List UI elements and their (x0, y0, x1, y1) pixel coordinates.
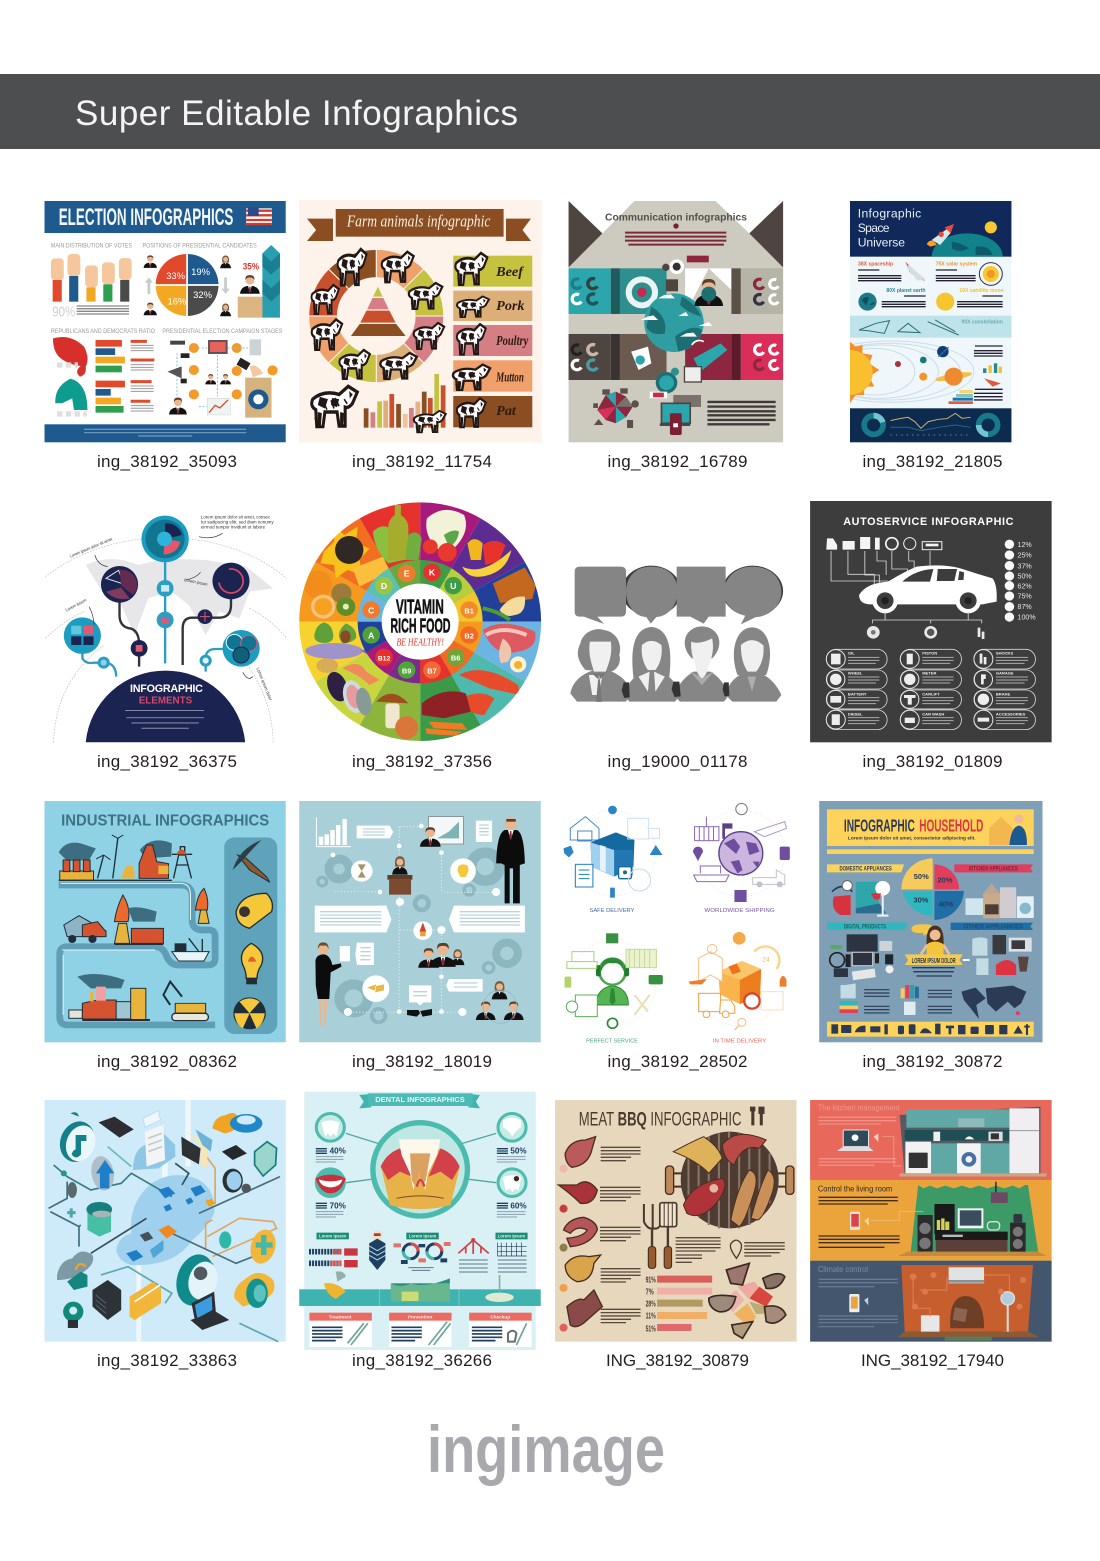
fork and spatula (644, 1203, 677, 1268)
meat pie (709, 1263, 786, 1338)
icon: flag (246, 208, 272, 225)
section headings: The kitchen management (818, 1103, 900, 1113)
tooth stats left (315, 1112, 346, 1210)
panel: space universe (850, 201, 1012, 442)
top icons (826, 537, 942, 550)
pin (730, 1240, 741, 1258)
outer sectors (299, 502, 541, 741)
panel: autoservice infographic (810, 501, 1052, 742)
icon: upload arrow (89, 1154, 117, 1192)
world map (86, 558, 273, 635)
panel: infographic household (819, 801, 1043, 1042)
facts: 16X satellite moon (959, 288, 1004, 294)
bottom chart bar (850, 408, 1011, 442)
section labels: KITCHEN APPLIANCES (969, 865, 1018, 872)
panel: delivery icons (564, 803, 790, 1044)
caption row 2: ing_19000_01178 (608, 752, 748, 771)
clock and laptop (650, 367, 701, 407)
icons: shuttle planets (858, 262, 1002, 311)
tooth stats left: 70% (330, 1201, 346, 1210)
candidates pie chart: 16% (167, 296, 186, 307)
callout boxes (315, 821, 525, 1006)
tablet (849, 1294, 868, 1312)
chevrons stack (369, 1231, 385, 1270)
panel: election infographics (45, 201, 286, 442)
wheel centre text: RICH FOOD (390, 614, 451, 637)
treatment cards: Prevention (408, 1315, 432, 1320)
dotted connectors (334, 827, 496, 1012)
domestic items (832, 881, 890, 916)
presentation screen (420, 817, 463, 847)
woman with banner: LOREM IPSUM DOLOR (912, 958, 956, 965)
vitamin badges: B1 (464, 606, 474, 615)
pill text: DIESEL (848, 711, 863, 716)
icon: rack server (92, 1280, 121, 1320)
panel: farm animals (299, 200, 542, 442)
worldwide shipping: WORLDWIDE SHIPPING (704, 908, 775, 914)
central cloud (116, 1175, 214, 1265)
panel: dental infographics (299, 1092, 541, 1350)
meat labels: Beef (495, 264, 524, 280)
percent list: 12% (1018, 542, 1032, 549)
household pie: 50% (914, 872, 929, 881)
digital items (830, 934, 894, 980)
gears (318, 853, 518, 1022)
rocket (927, 224, 954, 247)
constellation strip: 90X constellation (961, 319, 1003, 325)
election title: ELECTION INFOGRAPHICS (59, 204, 233, 231)
panel: election infographics: PRESIDENTIAL ELECTION CAMPAIGN STAGES (162, 328, 283, 335)
podium speaker (387, 856, 412, 895)
vitamin badges: C (368, 605, 375, 615)
caption row 3: ing_38192_28502 (608, 1052, 748, 1071)
pill text: METER (922, 671, 937, 676)
in time delivery (688, 932, 786, 1044)
globe (641, 293, 712, 352)
safe delivery: SAFE DELIVERY (590, 908, 635, 914)
team and trio (418, 943, 524, 1023)
dental ribbon title (359, 1093, 480, 1108)
ring icons (570, 277, 781, 372)
bar chart: 28% (646, 1300, 656, 1309)
section headings (818, 1103, 900, 1274)
industrial title: INDUSTRIAL INFOGRAPHICS (61, 812, 269, 830)
caption row 4: ING_38192_30879 (606, 1351, 749, 1370)
elephant and donkey icons (53, 337, 88, 414)
vitamin badges: E (404, 569, 410, 579)
candidates pie chart: 32% (193, 289, 212, 300)
panel: communication infographics (569, 201, 783, 442)
big tooth (370, 1120, 470, 1219)
small chart and pyramid (949, 363, 1002, 404)
pill text: ACCESSORIES (996, 711, 1026, 716)
pill text: BRAKE (996, 691, 1011, 696)
tree and grid (458, 1238, 527, 1256)
hexagonal pie (593, 388, 639, 428)
household banner: HOUSEHOLD (919, 816, 983, 836)
circle: puzzle (64, 617, 101, 654)
icon: trash (86, 1202, 112, 1237)
ship (172, 938, 209, 961)
icon: cloud top (212, 1113, 262, 1133)
caption row 3: ing_38192_30872 (862, 1052, 1002, 1071)
panel: election infographics: REPUBLICANS AND DEMOCRATS RATIO (51, 328, 155, 335)
tooth stats right: 60% (510, 1201, 527, 1210)
pill text: BATTERY (848, 691, 867, 696)
caption row 1: ing_38192_35093 (97, 452, 237, 471)
bar chart (364, 374, 445, 428)
constellation strip (850, 316, 1011, 338)
bar chart (646, 1276, 712, 1333)
facts (858, 261, 1004, 294)
bar chart: 91% (646, 1276, 656, 1285)
space title: Space (858, 221, 890, 235)
perfect service (565, 933, 663, 1044)
icon: router (222, 1145, 247, 1160)
orange hub (158, 1225, 177, 1238)
road (59, 885, 215, 1025)
percent list: 100% (1018, 614, 1036, 621)
footer bar (45, 424, 286, 442)
percent list: 62% (1018, 583, 1032, 590)
kitchen items (965, 883, 1034, 918)
ring charts (393, 1242, 451, 1264)
caption row 1: ing_38192_21805 (862, 452, 1002, 471)
callouts: Lorem ipsum dolor sit amet (69, 536, 114, 559)
caption row 1: ing_38192_16789 (608, 452, 748, 471)
bar chart: 11% (646, 1312, 656, 1321)
lorem tags (316, 1233, 528, 1239)
pill text: CARLIFT (922, 691, 940, 696)
communication title: Communication infographics (605, 213, 747, 224)
caption row 1: ing_38192_11754 (352, 452, 492, 471)
cloud servers (126, 1185, 206, 1262)
space title: Infographic (858, 206, 921, 220)
percent list: 50% (1018, 573, 1032, 580)
panel: election infographics: 90% (52, 305, 75, 321)
businesswoman (315, 942, 341, 1026)
panel: vitamin wheel (299, 502, 541, 741)
pill text: OIL (848, 651, 855, 656)
callouts: Lorem ipsum (65, 597, 88, 613)
section labels: DOMESTIC APPLIANCES (839, 866, 892, 873)
wheel centre text: BE HEALTHY! (397, 638, 444, 649)
arch (86, 671, 245, 742)
icon: lock cloud (57, 1252, 93, 1290)
facts: 75X solar system (936, 261, 978, 267)
phone (850, 1212, 869, 1230)
caption row 4: ING_38192_17940 (861, 1351, 1004, 1370)
icon: plus badge (247, 1227, 279, 1266)
speech bubbles (575, 566, 783, 624)
section headings: Control the living room (818, 1183, 892, 1193)
phone on laptop (660, 403, 690, 435)
percent list: 75% (1018, 594, 1032, 601)
treatment cards (309, 1313, 532, 1347)
campaign stages (167, 339, 278, 418)
tooth stats right (497, 1112, 528, 1210)
vitamin badges: B2 (464, 631, 474, 640)
icon: disc (171, 1250, 222, 1310)
icon: device (61, 1170, 77, 1218)
meat labels: Poultry (496, 333, 529, 349)
icon: laptop (190, 1292, 229, 1330)
service pills (826, 649, 1035, 730)
household banner: INFOGRAPHIC (844, 816, 915, 836)
person 2 (624, 627, 680, 702)
circle: pie (101, 566, 138, 603)
pill text: WHEEL (848, 671, 863, 676)
meat labels: Pork (496, 298, 525, 314)
panel: election infographics: MAIN DISTRIBUTION OF VOTES (51, 242, 132, 249)
household pie: 40% (938, 900, 954, 909)
callouts: Lorem ipsum (184, 577, 208, 587)
caption row 2: ing_38192_36375 (97, 752, 237, 771)
person 4 (726, 627, 781, 702)
section labels (827, 864, 1033, 931)
caption row 3 (97, 1052, 1002, 1071)
top factories (59, 835, 192, 880)
header banner (0, 74, 1100, 149)
icon: fork knife (750, 1107, 765, 1125)
dental ribbon title: DENTAL INFOGRAPHICS (375, 1095, 465, 1104)
callouts: tur sadipscing elitr, sed diam nonumy (201, 519, 274, 524)
space title (858, 206, 921, 250)
callouts: eirmod tempor invidunt ut labore (201, 524, 266, 529)
pyramid (351, 287, 406, 336)
tall businessman (496, 817, 525, 903)
percent list: 37% (1018, 563, 1032, 570)
callouts (65, 514, 274, 702)
panel: smart home (810, 1100, 1052, 1342)
megaphone and satellite (631, 340, 727, 372)
autoservice title: AUTOSERVICE INFOGRAPHIC (843, 516, 1014, 528)
connector lines (831, 551, 930, 585)
header title: Super Editable Infographics (75, 94, 518, 133)
caption row 4: ing_38192_36266 (352, 1351, 492, 1370)
space title: Universe (858, 236, 905, 250)
animals (312, 249, 444, 427)
household pie (901, 858, 964, 920)
icon: magnifier (223, 1169, 251, 1193)
caption row 4 (97, 1351, 1004, 1370)
treatment cards: Checkup (490, 1315, 510, 1320)
big circle: top (141, 516, 189, 562)
candidates pie chart: 33% (166, 270, 185, 281)
panel: speech bubbles and people (570, 566, 783, 702)
callouts: Lorem ipsum dolor (255, 667, 274, 702)
donut chart (309, 249, 444, 383)
footer logo: ingimage (427, 1412, 665, 1486)
meat labels: Pat (496, 403, 517, 419)
lorem tags: Lorem Ipsum (498, 1234, 525, 1239)
lower icons (867, 626, 984, 639)
candidates pie chart: 19% (191, 266, 210, 277)
panel: infographic elements (45, 514, 287, 742)
connector lines (346, 1133, 496, 1183)
caption row 3: ing_38192_18019 (352, 1052, 492, 1071)
vitamin badges: B9 (402, 666, 411, 675)
other appliances (963, 935, 1032, 975)
panel: election infographics: 35% (243, 261, 259, 271)
bar chart: 7% (646, 1288, 654, 1297)
household pie: 20% (937, 875, 953, 884)
small nodes (98, 580, 212, 669)
panel: industrial infographics (45, 801, 286, 1042)
household banner (827, 809, 1034, 854)
circle: gauge (212, 563, 250, 599)
grill (666, 1132, 794, 1228)
icon: phone (99, 1117, 134, 1138)
woman with banner (905, 924, 963, 976)
caption row 1 (97, 452, 1002, 471)
panel: meat bbq infographic (555, 1100, 797, 1342)
pill text: PISTON (922, 651, 937, 656)
candidates pie chart (155, 253, 219, 317)
bar chart: 51% (646, 1324, 656, 1333)
section headings: Climate control (818, 1264, 868, 1274)
ribbon title: Farm animals infographic (346, 212, 491, 231)
living room (898, 1180, 1047, 1256)
chart (316, 818, 351, 847)
perfect service: PERFECT SERVICE (586, 1038, 638, 1044)
household banner: Lorem ipsum dolor sit amet, consectetur adipiscing elit. (848, 835, 976, 840)
tooth stats right: 50% (510, 1146, 527, 1155)
section labels: OTHER APPLIANCES (964, 924, 1023, 931)
pill text: SHOCKS (996, 651, 1014, 656)
person with devices (662, 256, 723, 306)
vitamin badges: A (368, 630, 375, 640)
percent list: 87% (1018, 604, 1032, 611)
meat labels: Mutton (496, 370, 524, 386)
vitamin ring (358, 560, 483, 683)
person 3 (673, 626, 729, 702)
mid factory and truck (64, 888, 209, 944)
appliance strip (827, 1022, 1034, 1037)
tooth stats left: 40% (330, 1146, 346, 1155)
ratio bars (96, 340, 125, 413)
legend dots (559, 1165, 568, 1332)
vitamin badges: B6 (451, 654, 460, 663)
panel: business teamwork (299, 801, 541, 1042)
icon: headphones cloud (234, 1273, 274, 1308)
person 1 (570, 629, 631, 702)
bottom infographic row (839, 983, 1026, 1019)
earth and sun (932, 221, 1003, 257)
vitamin badges: K (429, 568, 436, 578)
percent list (1005, 540, 1036, 622)
treatment cards: Treatment (329, 1315, 352, 1320)
vitamin badges: B12 (378, 655, 390, 662)
arch: ELEMENTS (139, 696, 192, 707)
icon: folder (130, 1282, 161, 1320)
power plant and excavator (69, 974, 208, 1021)
icon: music (54, 1112, 100, 1167)
icon: gear (63, 1302, 83, 1328)
food illustrations (304, 505, 536, 739)
caption row 3: ing_38192_08362 (97, 1052, 237, 1071)
caption row 2: ing_38192_37356 (352, 752, 492, 771)
pill text: GARAGE (996, 671, 1014, 676)
network lines (49, 1147, 280, 1342)
coloured bands (569, 268, 783, 380)
connectors (82, 560, 231, 677)
panel: isometric network (45, 1100, 286, 1342)
wheel centre text: VITAMIN (396, 596, 444, 619)
percent list: 25% (1018, 553, 1032, 560)
car (859, 565, 997, 613)
teal band (299, 1271, 541, 1306)
meat icons (558, 1137, 602, 1327)
solar system (850, 340, 974, 404)
worldwide shipping (693, 803, 790, 914)
ribbon title (307, 209, 531, 241)
bbq title: MEAT BBQ INFOGRAPHIC (579, 1108, 742, 1130)
household pie: 30% (913, 895, 929, 904)
pill text (848, 651, 1026, 716)
meat labels (453, 253, 532, 427)
vitamin badges: B7 (427, 666, 437, 675)
panel: election infographics: POSITIONS OF PRESIDENTIAL CANDIDATES (142, 242, 257, 249)
lorem tags: Lorem Ipsum (409, 1234, 436, 1239)
caption row 2 (97, 752, 1002, 771)
caption row 4: ing_38192_33863 (97, 1351, 237, 1370)
in time delivery: 24 (762, 957, 770, 964)
icon: server books (181, 1129, 212, 1168)
shoulder overlaps (622, 682, 729, 698)
badge icons (351, 858, 476, 1002)
arch: INFOGRAPHIC (130, 683, 203, 695)
pill text: CAR WASH (922, 711, 944, 716)
climate room (898, 1265, 1040, 1341)
wheel centre text (382, 584, 459, 660)
facts: 80X planet earth (886, 288, 925, 294)
lorem tags: Lorem Ipsum (319, 1234, 347, 1239)
vitamin badges: U (450, 581, 456, 591)
callouts: Lorem ipsum dolor sit amet, consec (201, 514, 271, 519)
handshake (407, 1009, 432, 1017)
votes bar chart (51, 254, 132, 302)
vitamin badges: D (381, 581, 387, 591)
section labels: DIGITAL PRODUCTS (844, 924, 886, 931)
laptop (837, 1130, 878, 1151)
icon: paper cloud (133, 1111, 175, 1170)
safe delivery (564, 806, 662, 914)
people chart (309, 1248, 358, 1267)
caption row 2: ing_38192_01809 (862, 752, 1002, 771)
in time delivery: IN TIME DELIVERY (713, 1038, 766, 1044)
vitamin badges (362, 564, 478, 679)
grilled meats (673, 1134, 774, 1227)
pill icons (826, 650, 993, 729)
mail icon (626, 276, 658, 308)
tools column (224, 837, 277, 1034)
kitchen (900, 1107, 1047, 1175)
icon: shield (255, 1142, 277, 1176)
facts: 38X spaceship (858, 261, 893, 267)
circle: venn (223, 630, 260, 667)
